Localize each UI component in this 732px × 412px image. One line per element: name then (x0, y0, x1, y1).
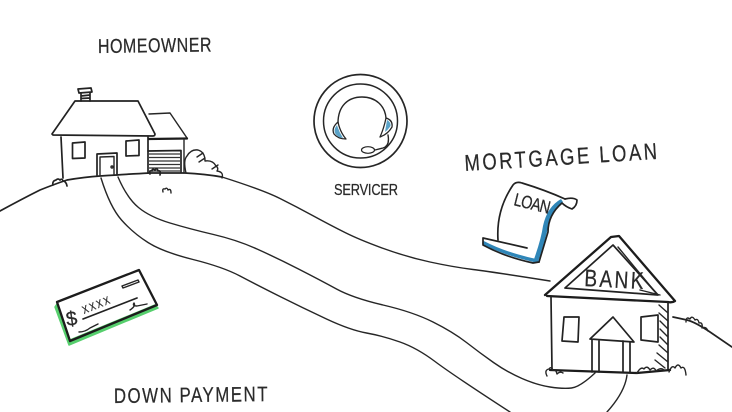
walls (61, 137, 148, 178)
grass tufts (53, 169, 171, 193)
right earpiece (380, 118, 392, 137)
microphone (375, 135, 388, 150)
bank walls (551, 297, 668, 370)
amount: XXXX (81, 295, 112, 317)
dollar sign: $ (65, 308, 79, 331)
bank roof (545, 236, 675, 302)
title: homeowner: HOMEOWNER (98, 34, 212, 57)
bank sign: BANK (584, 264, 645, 295)
label: mortgage loan: MORTGAGE LOAN (464, 139, 658, 177)
bush (185, 150, 222, 178)
garage (148, 113, 187, 173)
windows (72, 140, 139, 158)
amount line (83, 298, 137, 319)
icon: servicer headset in double circle (314, 74, 407, 168)
headband (338, 97, 386, 123)
check details (79, 280, 147, 332)
hill and roads (0, 173, 732, 412)
icon: check (55, 270, 158, 345)
main roof (52, 101, 155, 136)
icon: loan scroll (483, 182, 577, 263)
label: servicer: SERVICER (334, 182, 398, 199)
chimney (78, 88, 92, 101)
label: down payment: DOWN PAYMENT (114, 383, 268, 409)
wall hatching (655, 305, 668, 368)
icon: homeowner house (52, 88, 222, 193)
loan text: LOAN (512, 190, 552, 218)
bank grass (546, 365, 686, 376)
bank windows (562, 315, 658, 342)
door (97, 153, 117, 175)
left earpiece (333, 122, 346, 139)
portico (590, 317, 634, 372)
icon: bank building (545, 236, 686, 376)
